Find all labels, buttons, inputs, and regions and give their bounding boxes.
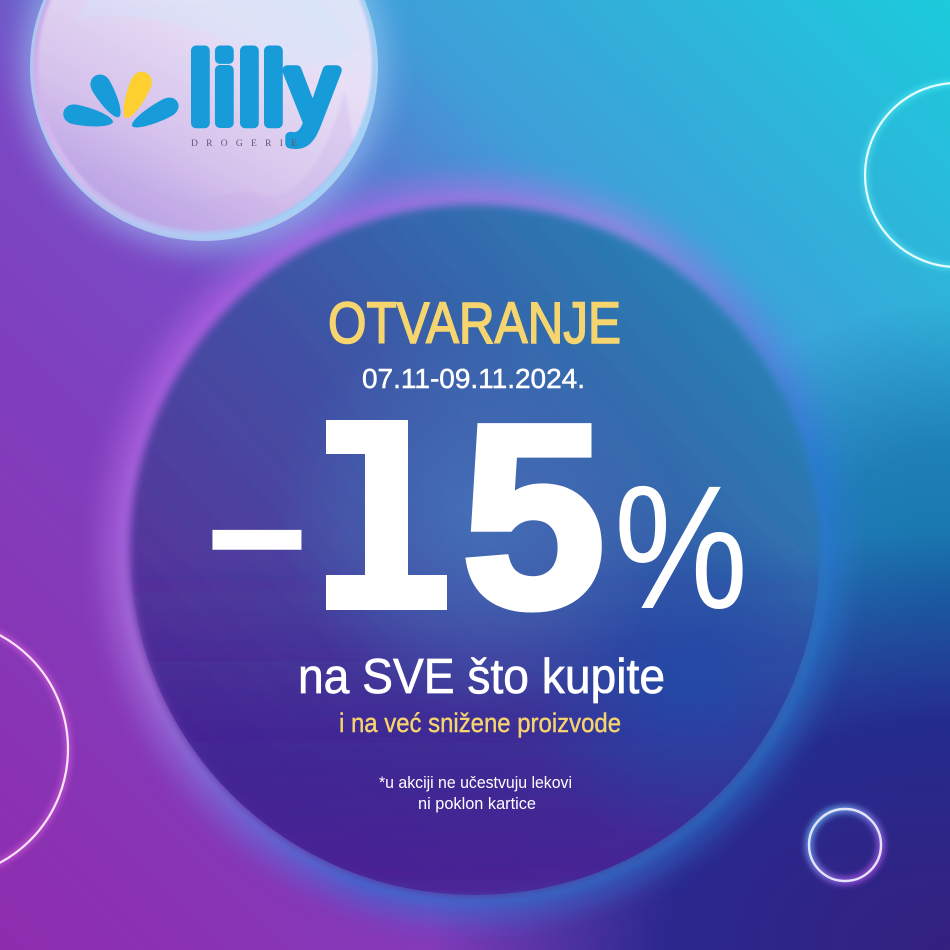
digit 5: 5: [462, 372, 605, 662]
footnote: ni poklon kartice: [418, 794, 536, 813]
discount figure: [212, 420, 743, 612]
digit 1: 1: [301, 371, 448, 667]
footnote: *u akciji ne učestvuju lekovi: [379, 773, 572, 792]
percent sign: %: [614, 450, 748, 646]
logo wordmark: lilly: [189, 33, 337, 145]
secondary offer text: i na već snižene proizvode: [339, 708, 621, 738]
icon: flower petals: [62, 68, 182, 134]
heading: OTVARANJE: [328, 291, 621, 356]
large central circle: [100, 192, 860, 950]
footnote: [379, 773, 572, 813]
date: 07.11-09.11.2024.: [362, 363, 585, 394]
main offer text: na SVE što kupite: [298, 650, 665, 704]
ring: bottom right: [809, 809, 881, 881]
logo bubble: [20, 0, 388, 251]
ring: left: [0, 620, 68, 878]
logo subtitle: DROGERIE: [191, 139, 297, 149]
ring: top right: [865, 83, 950, 267]
digit 1: [326, 420, 447, 610]
logo: [62, 33, 337, 149]
minus sign: –: [207, 414, 307, 636]
